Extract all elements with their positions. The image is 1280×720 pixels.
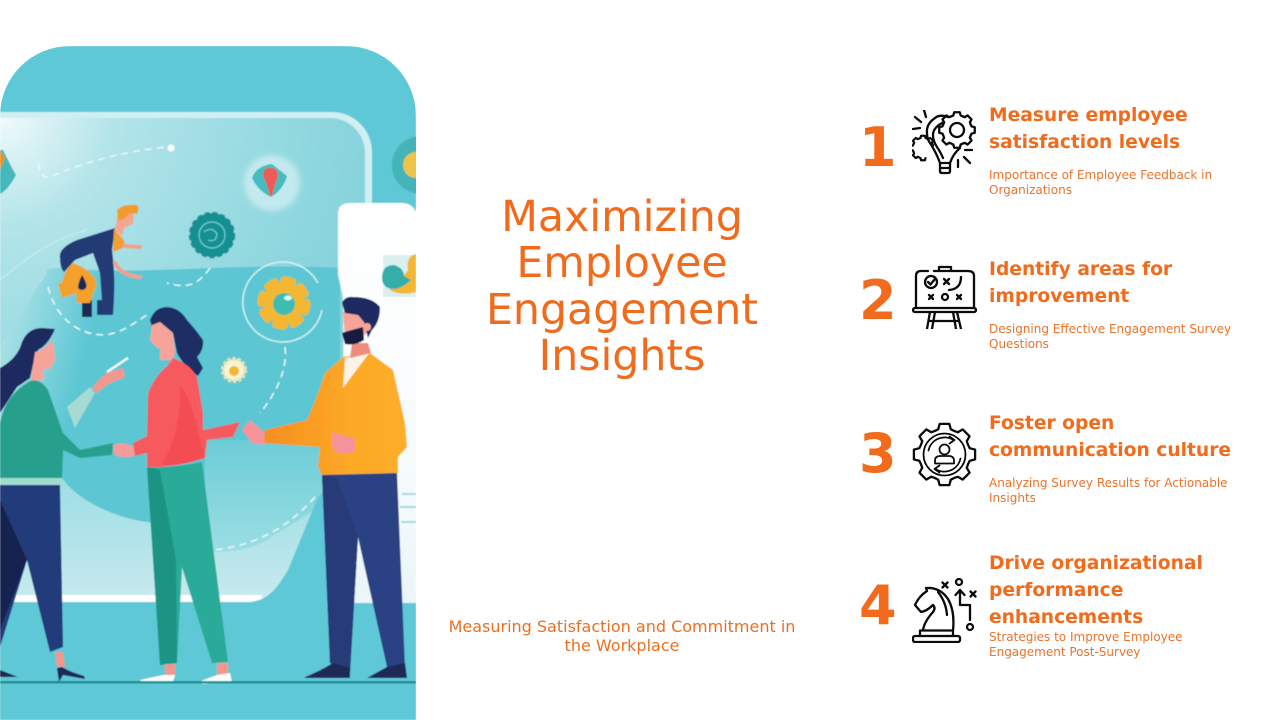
heading 2: improvement — [989, 286, 1129, 307]
bending worker — [58, 205, 140, 317]
title: Employee — [516, 238, 728, 288]
description 1 — [989, 168, 1212, 197]
title — [486, 192, 758, 381]
subtitle: the Workplace — [565, 636, 679, 655]
description 2: Designing Effective Engagement Survey — [989, 322, 1231, 336]
icon: gear with person — [912, 422, 976, 486]
yellow gear badge — [243, 262, 322, 342]
heading 2: Identify areas for — [989, 259, 1172, 280]
description 3: Analyzing Survey Results for Actionable — [989, 476, 1228, 490]
icon: lightbulb with gears — [912, 110, 976, 174]
heading 4: Drive organizational — [989, 553, 1203, 574]
description 1: Organizations — [989, 183, 1072, 197]
description 1: Importance of Employee Feedback in — [989, 168, 1212, 182]
heading 1: satisfaction levels — [989, 132, 1180, 153]
title: Maximizing — [501, 192, 743, 242]
title: Insights — [539, 331, 705, 381]
number 1: 1 — [859, 116, 897, 179]
number 2: 2 — [859, 269, 897, 332]
description 2: Questions — [989, 337, 1049, 351]
description 3 — [989, 476, 1228, 505]
left woman — [0, 328, 134, 682]
heading 3 — [989, 413, 1231, 461]
floor line — [0, 681, 416, 684]
side card — [338, 203, 416, 603]
screen — [0, 111, 373, 603]
pin badge — [244, 155, 300, 211]
number 3: 3 — [859, 422, 897, 485]
description 3: Insights — [989, 491, 1036, 505]
middle woman — [133, 307, 240, 684]
subtitle — [449, 617, 795, 655]
small flower — [223, 359, 245, 381]
icon: chess knight strategy — [912, 578, 977, 643]
heading 3: Foster open — [989, 413, 1114, 434]
dashed connector lines — [38, 147, 315, 550]
heading 4 — [989, 553, 1203, 628]
heading 1 — [989, 105, 1188, 153]
heading 1: Measure employee — [989, 105, 1188, 126]
card picture — [382, 254, 416, 297]
title: Engagement — [486, 284, 758, 334]
heading 3: communication culture — [989, 440, 1231, 461]
heading 2 — [989, 259, 1172, 307]
description 4 — [989, 630, 1183, 659]
description 4: Engagement Post-Survey — [989, 645, 1141, 659]
heading 4: performance — [989, 580, 1123, 601]
man — [242, 297, 407, 678]
teal badge — [190, 213, 234, 257]
subtitle: Measuring Satisfaction and Commitment in — [449, 617, 795, 636]
icon: tactics whiteboard — [912, 266, 977, 329]
number 4: 4 — [859, 574, 897, 637]
description 4: Strategies to Improve Employee — [989, 630, 1183, 644]
description 2 — [989, 322, 1231, 351]
illustration panel: people shaking hands — [0, 46, 416, 720]
heading 4: enhancements — [989, 607, 1143, 628]
